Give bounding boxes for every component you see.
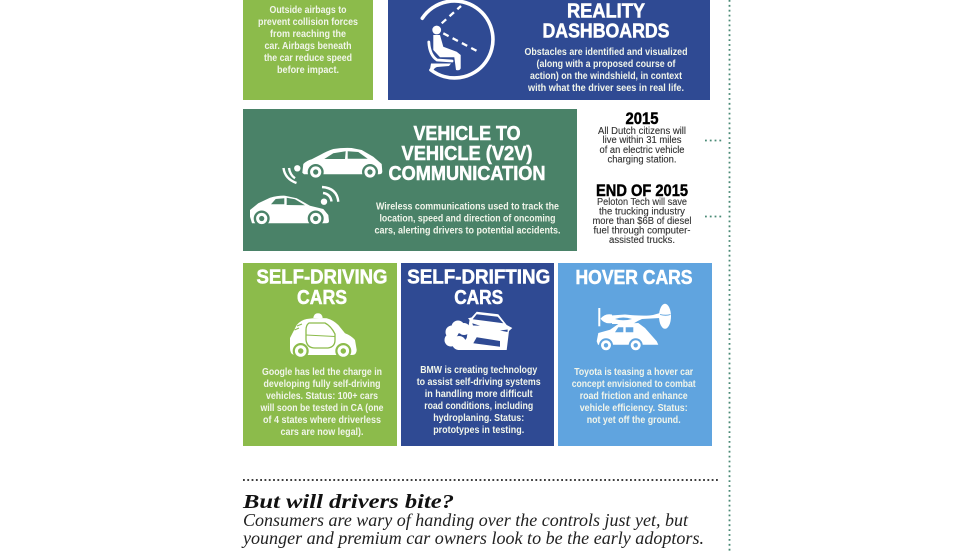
self-driving body text: will soon be tested in CA (one xyxy=(260,403,384,414)
hover cars body text xyxy=(572,367,696,426)
airbags body text: Outside airbags to xyxy=(270,5,347,16)
self-drifting body text: to assist self-driving systems xyxy=(417,377,541,388)
self-driving heading xyxy=(256,266,388,309)
airbags body text: the car reduce speed xyxy=(264,53,352,64)
self-driving body text: cars are now legal). xyxy=(280,427,364,438)
timeline entry: end of 2015: the trucking industry xyxy=(599,206,685,218)
reality dashboards body text xyxy=(524,47,688,94)
reality dashboards body text: Obstacles are identified and visualized xyxy=(524,47,688,58)
closing text: younger and premium car owners look to be the early adoptors. xyxy=(241,528,704,548)
reality dashboards heading xyxy=(542,0,670,42)
self-drifting heading xyxy=(407,266,550,309)
airbags body text: car. Airbags beneath xyxy=(264,41,352,52)
v2v body text: location, speed and direction of oncoming xyxy=(380,214,556,224)
hover cars body text: concept envisioned to combat xyxy=(572,379,696,390)
timeline entry: 2015: charging station. xyxy=(608,154,676,166)
timeline entry: end of 2015: more than $6B of diesel xyxy=(592,216,692,227)
self-drifting body text: in handling more difficult xyxy=(425,389,533,400)
panel: vehicle to vehicle communication xyxy=(243,109,577,251)
v2v body text xyxy=(374,202,561,236)
v2v heading: VEHICLE TO xyxy=(414,122,521,145)
hover cars body text: not yet off the ground. xyxy=(587,415,681,426)
self-driving body text: of 4 states where driverless xyxy=(263,415,382,426)
hover cars body text: Toyota is teasing a hover car xyxy=(574,367,693,378)
v2v body text: Wireless communications used to track the xyxy=(376,202,559,212)
timeline entry: end of 2015: fuel through computer- xyxy=(594,226,690,236)
timeline entry: end of 2015: Peloton Tech will save xyxy=(597,197,687,208)
self-driving heading: SELF-DRIVING xyxy=(256,266,388,288)
self-drifting body text: prototypes in testing. xyxy=(433,425,524,436)
timeline entry: end of 2015 xyxy=(592,181,692,246)
airbags body text: before impact. xyxy=(277,65,339,76)
icon: upper car with signal xyxy=(284,148,382,183)
airbags body text: prevent collision forces xyxy=(258,17,358,28)
panel: hover cars xyxy=(558,263,712,446)
self-drifting body text xyxy=(417,365,541,436)
v2v body text: cars, alerting drivers to potential accidents. xyxy=(374,226,561,236)
timeline entry: 2015 xyxy=(598,109,686,166)
timeline entry: 2015: 2015 xyxy=(626,109,658,128)
panel: self-driving cars xyxy=(243,263,397,446)
v2v heading: COMMUNICATION xyxy=(388,162,546,185)
icon: lower car with signal xyxy=(250,187,338,226)
self-drifting body text: BMW is creating technology xyxy=(420,365,538,376)
icon: drifting car with smoke xyxy=(444,312,512,350)
reality dashboards body text: with what the driver sees in real life. xyxy=(527,83,684,94)
timeline entry: 2015: live within 31 miles xyxy=(602,135,682,146)
airbags body text xyxy=(258,5,358,76)
reality dashboards body text: (along with a proposed course of xyxy=(536,59,676,70)
airbags body text: from reaching the xyxy=(270,29,346,40)
self-driving body text: developing fully self-driving xyxy=(264,379,381,390)
self-driving heading: CARS xyxy=(297,286,347,309)
icon: driver looking through windshield xyxy=(422,1,493,78)
hover cars heading: HOVER CARS xyxy=(576,266,692,289)
reality dashboards heading: DASHBOARDS xyxy=(542,20,670,42)
panel: outside airbags xyxy=(243,0,373,100)
self-driving body text xyxy=(260,367,384,438)
icon: self-driving pod car xyxy=(290,313,357,359)
timeline entry: 2015: All Dutch citizens will xyxy=(598,126,686,137)
hover cars body text: vehicle efficiency. Status: xyxy=(580,403,688,414)
self-drifting heading: CARS xyxy=(454,286,503,309)
closing heading: But will drivers bite? xyxy=(242,491,454,513)
self-drifting body text: road conditions, including xyxy=(424,401,533,412)
v2v heading xyxy=(388,122,546,185)
reality dashboards heading: REALITY xyxy=(567,0,645,22)
self-drifting heading: SELF-DRIFTING xyxy=(407,266,550,288)
reality dashboards body text: action) on the windshield, in context xyxy=(530,71,683,82)
hover cars body text: road friction and enhance xyxy=(580,391,688,402)
timeline entry: end of 2015: assisted trucks. xyxy=(609,235,675,246)
v2v heading: VEHICLE (V2V) xyxy=(402,142,532,165)
timeline entry: end of 2015: END OF 2015 xyxy=(596,181,688,200)
closing text: Consumers are wary of handing over the controls just yet, but xyxy=(243,510,689,530)
self-driving body text: Google has led the charge in xyxy=(262,367,382,378)
timeline entry: 2015: of an electric vehicle xyxy=(600,145,685,156)
panel: self-drifting cars xyxy=(401,263,554,446)
self-driving body text: vehicles. Status: 100+ cars xyxy=(266,391,378,402)
panel: reality dashboards xyxy=(388,0,710,100)
closing text xyxy=(241,510,704,548)
icon: hover car with propeller xyxy=(597,304,671,352)
self-drifting body text: hydroplaning. Status: xyxy=(433,413,524,424)
